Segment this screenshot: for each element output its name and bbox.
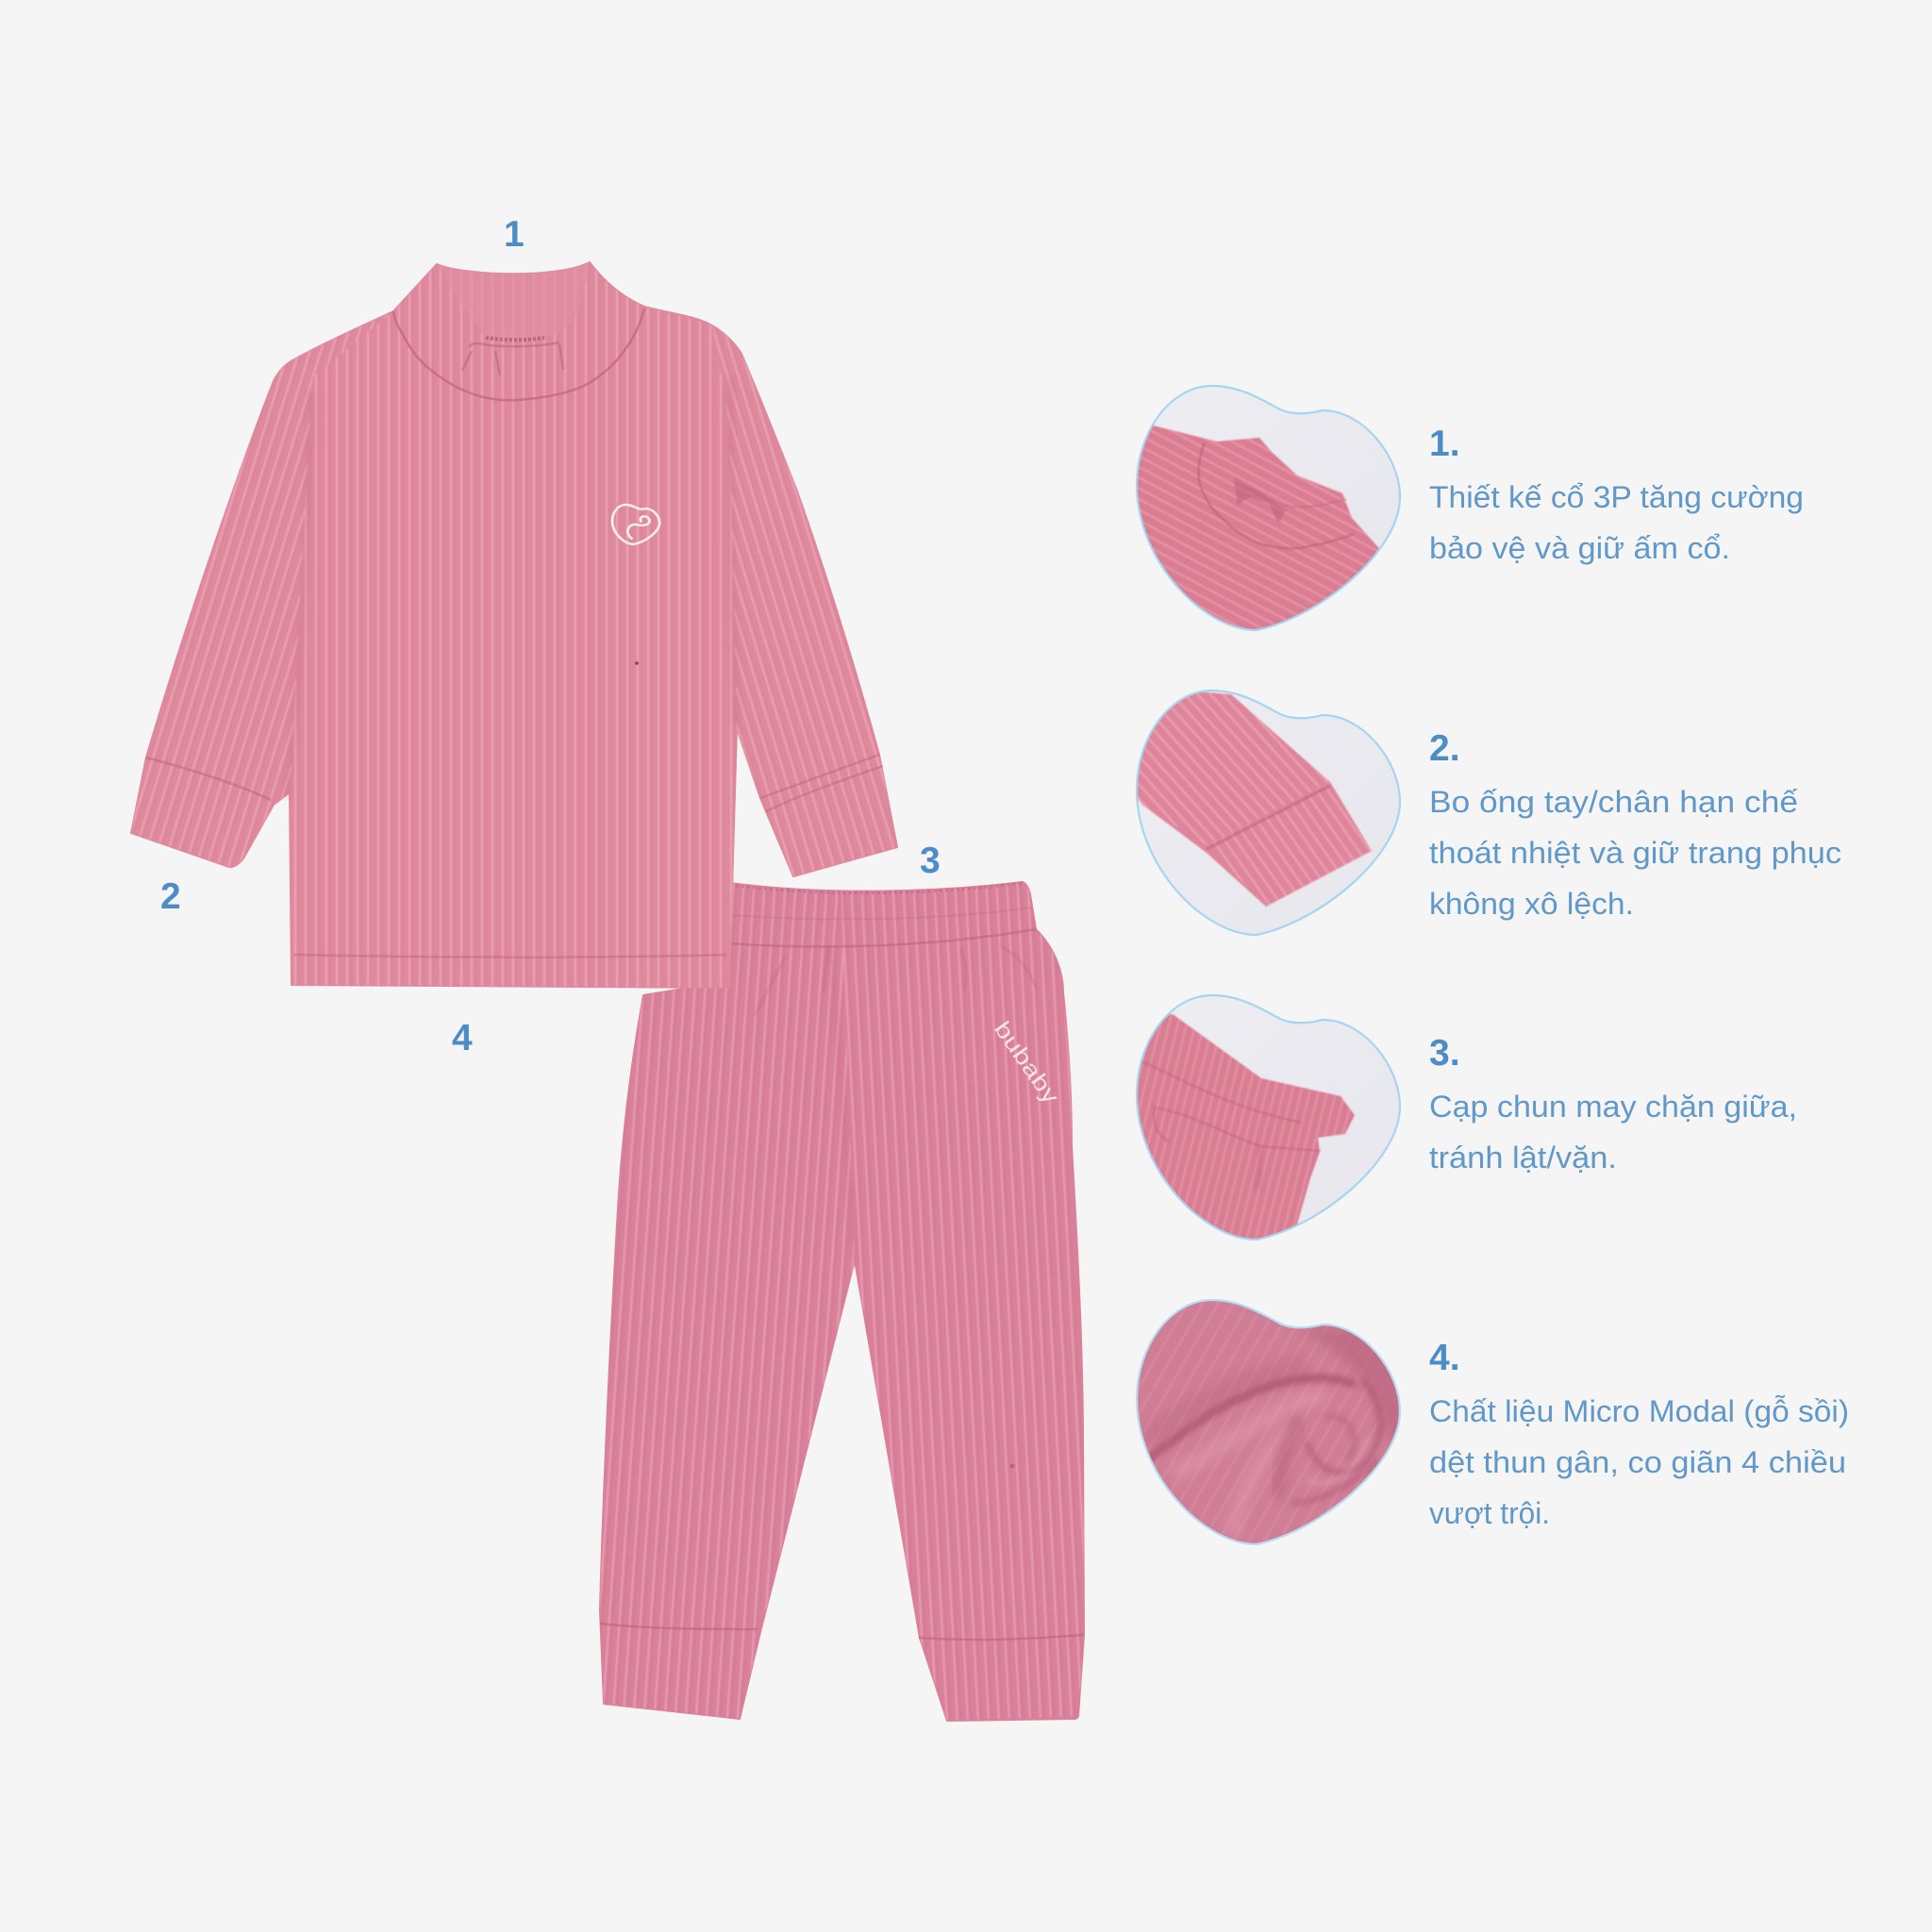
shirt: collar seam: [393, 308, 644, 400]
shirt: hem stitch: [294, 955, 726, 958]
fold: broad shadow: [1146, 1366, 1307, 1441]
fold: dark upper-right mass: [1307, 1326, 1399, 1438]
shirt: neck stitching: [486, 338, 544, 340]
pants: silhouette: [600, 882, 1084, 1721]
pants: rib texture: [600, 882, 1084, 1721]
pants: cuff seams: [600, 1624, 1084, 1640]
number marker 3: 3: [920, 841, 941, 881]
icon: shirt heart logo: [612, 505, 659, 544]
text: detail 4: dệt thun gân, co giãn 4 chiều: [1429, 1445, 1846, 1479]
text: detail 4: vượt trội.: [1429, 1496, 1550, 1530]
shirt: rib texture: [131, 262, 897, 988]
fold: vertical shadow: [1278, 1418, 1299, 1498]
pants: folds: [831, 949, 855, 1260]
number 3.: 3.: [1429, 1033, 1460, 1074]
fold: main diagonal shadow: [1146, 1378, 1356, 1460]
text: detail 4: Chất liệu Micro Modal (gỗ sồi): [1429, 1394, 1849, 1428]
text: detail 2: thoát nhiệt và giữ trang phục: [1429, 836, 1841, 870]
pants photo: [600, 882, 1084, 1721]
heart photo: waistband close-up: [1127, 995, 1400, 1259]
text: detail 2: Bo ống tay/chân hạn chế: [1429, 785, 1798, 819]
shirt: collar gathers: [462, 342, 563, 375]
text: detail 2: không xô lệch.: [1429, 887, 1634, 921]
heart photo: fabric swirl close-up: [1137, 1300, 1406, 1546]
panel: detail 4 fabric: [1137, 1300, 1849, 1546]
pants: logo text: bubaby: [989, 1017, 1064, 1108]
shirt: silhouette: [131, 262, 897, 988]
fold: swirl: [1307, 1380, 1380, 1473]
text: detail 1: bảo vệ và giữ ấm cổ.: [1429, 531, 1730, 565]
number marker 1: 1: [504, 214, 525, 255]
shirt: cuff seams: [146, 758, 271, 800]
number 1.: 1.: [1429, 424, 1460, 464]
shirt: sleeve shadows: [286, 377, 737, 798]
pants: waistband seams: [730, 883, 1023, 893]
heart photo: collar close-up: [1136, 385, 1402, 632]
shirt: inner back collar: [437, 262, 590, 338]
heart photo: sleeve cuff close-up: [1127, 686, 1400, 937]
number 4.: 4.: [1429, 1338, 1460, 1378]
number 2.: 2.: [1429, 728, 1460, 769]
number marker 2: 2: [160, 876, 181, 917]
text: detail 1: Thiết kế cổ 3P tăng cường: [1429, 480, 1804, 514]
text: detail 3: tránh lật/vặn.: [1429, 1141, 1617, 1174]
panel: detail 1 neck: [1136, 385, 1802, 632]
shirt photo: [131, 262, 897, 988]
panel: detail 2 cuff: [1127, 686, 1841, 937]
fold: highlights: [1174, 1394, 1325, 1474]
panel: detail 3 waistband: [1127, 995, 1797, 1259]
number marker 4: 4: [452, 1018, 473, 1058]
text: detail 3: Cạp chun may chặn giữa,: [1429, 1090, 1797, 1124]
